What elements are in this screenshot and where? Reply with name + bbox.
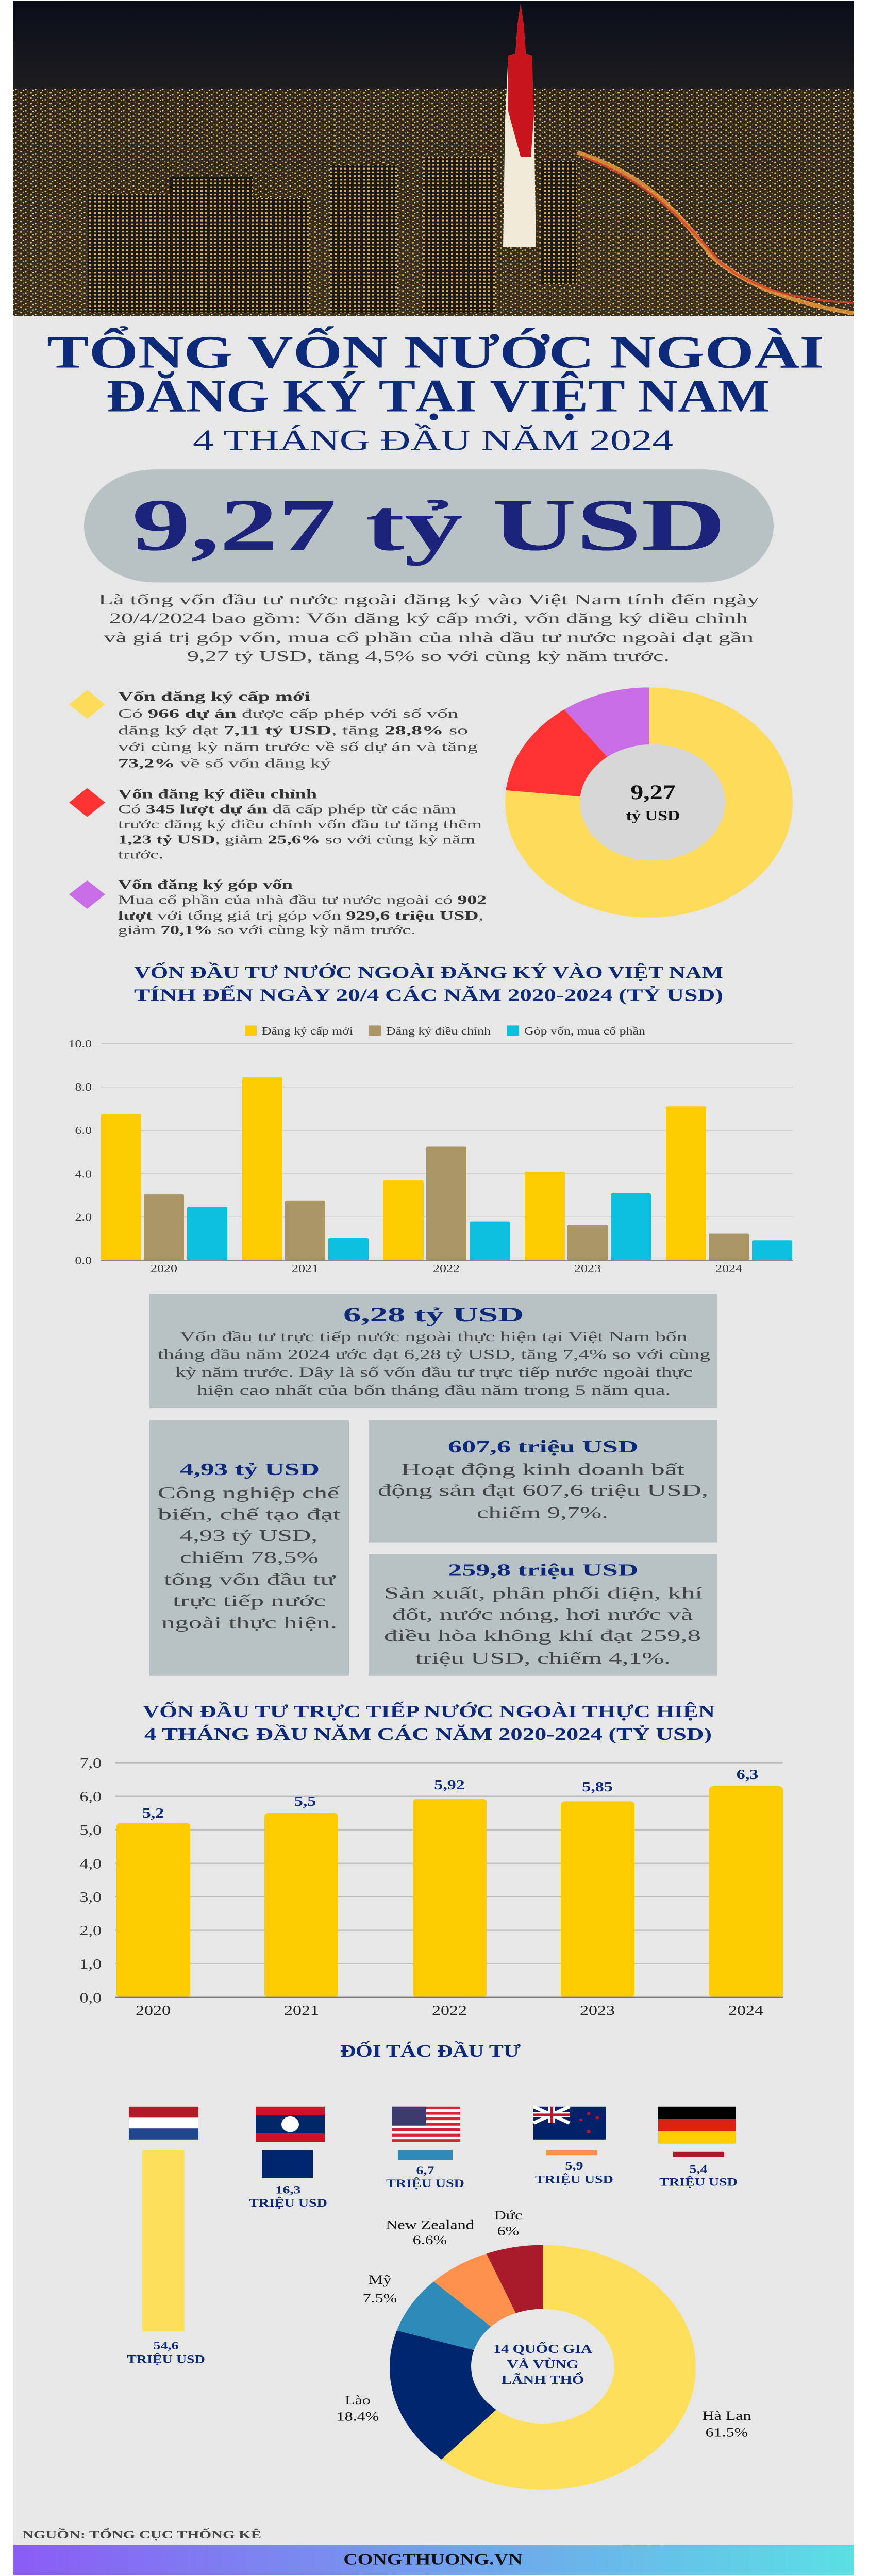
- bar chart: implemented FDI 2020-2024: 5,85: [582, 1779, 613, 1794]
- footer bar: [13, 2545, 854, 2575]
- callout: 6,28 tỷ USD implemented: Vốn đầu tư trực tiếp nước ngoài thực hiện tại Việt Nam bốn: [180, 1329, 687, 1344]
- partner: Germany: [658, 2107, 738, 2189]
- legend: Góp vốn, mua cổ phần: [524, 1025, 645, 1037]
- callout: manufacturing 4,93 tỷ USD: 4,93 tỷ USD: [180, 1460, 320, 1479]
- item: new registration: đăng ký đạt 7,11 tỷ USD , tăng 28,8% so: [118, 723, 468, 737]
- bar chart: implemented FDI 2020-2024: [80, 1755, 783, 2018]
- partner: New Zealand: TRIỆU USD: [535, 2173, 613, 2186]
- hero photo: city at night: [13, 1, 854, 316]
- donut chart: partner shares: 14 QUỐC GIA: [493, 2342, 592, 2356]
- legend: Đăng ký điều chỉnh: [386, 1025, 491, 1037]
- icon: landmark tower: [503, 4, 536, 247]
- bar chart: registered FDI 2020-2024: 8.0: [75, 1081, 92, 1093]
- item: adjusted registration: Có 345 lượt dự án đã cấp phép từ các năm: [118, 802, 456, 816]
- partner: Laos: TRIỆU USD: [249, 2197, 327, 2210]
- bar chart: implemented FDI 2020-2024: 2024: [728, 2003, 763, 2018]
- callout: real estate 607,6 triệu USD: chiếm 9,7%.: [477, 1503, 608, 1521]
- bar chart: implemented FDI 2020-2024: 5,2: [142, 1805, 164, 1821]
- callout: energy 259,8 triệu USD: [369, 1554, 717, 1676]
- heading: investment partners: ĐỐI TÁC ĐẦU TƯ: [340, 2041, 521, 2061]
- callout: energy 259,8 triệu USD: Sản xuất, phân phối điện, khí: [384, 1584, 703, 1602]
- callout: manufacturing 4,93 tỷ USD: ngoài thực hiện.: [161, 1614, 337, 1632]
- intro paragraph: [98, 591, 759, 664]
- bar chart: implemented FDI 2020-2024: 1,0: [80, 1956, 102, 1972]
- donut chart: partner shares: Mỹ: [369, 2273, 392, 2287]
- bar chart: implemented FDI 2020-2024: 7,0: [80, 1755, 102, 1771]
- donut chart: partner shares: LÃNH THỔ: [502, 2372, 584, 2387]
- bar chart: implemented FDI 2020-2024: 6,0: [80, 1789, 102, 1804]
- heading: registered FDI chart: VỐN ĐẦU TƯ NƯỚC NGOÀI ĐĂNG KÝ VÀO VIỆT NAM: [134, 962, 723, 982]
- bar chart: registered FDI 2020-2024: [69, 1038, 793, 1275]
- bar chart: implemented FDI 2020-2024: 2,0: [80, 1923, 102, 1938]
- callout: 6,28 tỷ USD implemented: tháng đầu năm 2024 ước đạt 6,28 tỷ USD, tăng 7,4% so với cùng: [158, 1347, 710, 1362]
- intro paragraph: và giá trị góp vốn, mua cổ phần của nhà đầu tư nước ngoài đạt gần: [104, 630, 754, 646]
- panel: capital components: [69, 689, 487, 937]
- bar chart: registered FDI 2020-2024: 2021: [292, 1263, 319, 1275]
- callout: real estate 607,6 triệu USD: [369, 1420, 717, 1543]
- icon: flag Netherlands: [129, 2107, 198, 2140]
- item: adjusted registration: [118, 787, 482, 861]
- bar chart: registered FDI 2020-2024: 4.0: [75, 1168, 92, 1180]
- footer bar: CONGTHUONG.VN: [343, 2551, 523, 2568]
- source note: NGUỒN: TỔNG CỤC THỐNG KÊ: [22, 2528, 261, 2541]
- item: adjusted registration: 1,23 tỷ USD , giảm 25,6% so với cùng kỳ năm: [118, 833, 475, 846]
- partner: USA: TRIỆU USD: [386, 2177, 464, 2190]
- item: new registration: Có 966 dự án được cấp phép với số vốn: [118, 707, 459, 720]
- bar chart: registered FDI 2020-2024: 0.0: [75, 1255, 92, 1267]
- bar chart: registered FDI 2020-2024: 2020: [151, 1263, 177, 1275]
- partner: New Zealand: 5,9: [565, 2160, 583, 2173]
- partner: New Zealand: [533, 2107, 613, 2186]
- partner: Germany: 5,4: [690, 2163, 708, 2176]
- heading: implemented FDI chart: VỐN ĐẦU TƯ TRỰC TIẾP NƯỚC NGOÀI THỰC HIỆN: [143, 1701, 715, 1721]
- item: new registration: 73,2% về số vốn đăng ký: [118, 756, 331, 770]
- item: capital contribution: giảm 70,1% so với cùng kỳ năm trước.: [118, 923, 415, 937]
- callout: real estate 607,6 triệu USD: Hoạt động kinh doanh bất: [401, 1460, 684, 1478]
- bar chart: registered FDI 2020-2024: 2024: [715, 1263, 742, 1275]
- donut chart: partner shares: Đức: [494, 2208, 522, 2223]
- bar chart: implemented FDI 2020-2024: 5,0: [80, 1822, 102, 1838]
- callout: real estate 607,6 triệu USD: 607,6 triệu USD: [448, 1437, 638, 1456]
- callout: 6,28 tỷ USD implemented: [149, 1294, 717, 1408]
- callout: manufacturing 4,93 tỷ USD: chiếm 78,5%: [180, 1548, 319, 1567]
- title: [47, 326, 824, 421]
- item: capital contribution: Vốn đăng ký góp vốn: [118, 877, 293, 892]
- intro paragraph: 9,27 tỷ USD, tăng 4,5% so với cùng kỳ năm trước.: [187, 648, 670, 664]
- item: new registration: [118, 689, 478, 770]
- bar chart: implemented FDI 2020-2024: 5,92: [434, 1777, 465, 1792]
- callout: 6,28 tỷ USD implemented: hiện cao nhất của bốn tháng đầu năm trong 5 năm qua.: [197, 1383, 671, 1398]
- heading: registered FDI chart: TÍNH ĐẾN NGÀY 20/4 CÁC NĂM 2020-2024 (TỶ USD): [134, 985, 723, 1005]
- title: TỔNG VỐN NƯỚC NGOÀI: [47, 326, 824, 378]
- callout: energy 259,8 triệu USD: triệu USD, chiếm 4,1%.: [415, 1649, 671, 1667]
- bar chart: implemented FDI 2020-2024: 2023: [580, 2003, 615, 2018]
- partner: Netherlands: [127, 2107, 205, 2366]
- bar chart: registered FDI 2020-2024: 2022: [433, 1263, 460, 1275]
- donut chart: partner shares: 7.5%: [363, 2291, 397, 2306]
- donut chart: partner shares: New Zealand: [386, 2217, 474, 2232]
- bar chart: registered FDI 2020-2024: 2.0: [75, 1212, 92, 1224]
- subtitle: 4 THÁNG ĐẦU NĂM 2024: [193, 423, 673, 457]
- donut chart: partner shares: 61.5%: [706, 2426, 748, 2440]
- callout: manufacturing 4,93 tỷ USD: [149, 1420, 349, 1676]
- partner: Laos: [249, 2107, 327, 2210]
- bar chart: implemented FDI 2020-2024: 4,0: [80, 1856, 102, 1872]
- headline pill: total: 9,27 tỷ USD: [132, 484, 726, 566]
- donut chart: partner shares: 6.6%: [413, 2233, 447, 2247]
- callout: manufacturing 4,93 tỷ USD: biến, chế tạo đạt: [158, 1505, 341, 1523]
- heading: registered FDI chart: [134, 962, 723, 1005]
- item: adjusted registration: trước.: [118, 848, 163, 861]
- partner: Netherlands: TRIỆU USD: [127, 2353, 205, 2366]
- callout: 6,28 tỷ USD implemented: kỳ năm trước. Đây là số vốn đầu tư trực tiếp nước ngoài thực: [175, 1365, 693, 1380]
- callout: energy 259,8 triệu USD: đốt, nước nóng, hơi nước và: [392, 1605, 693, 1623]
- bar chart: implemented FDI 2020-2024: 2020: [136, 2003, 171, 2018]
- intro paragraph: Là tổng vốn đầu tư nước ngoài đăng ký vào Việt Nam tính đến ngày: [98, 591, 759, 607]
- partner: Netherlands: 54,6: [154, 2340, 178, 2352]
- legend: [245, 1025, 645, 1037]
- partner: USA: 6,7: [416, 2164, 434, 2177]
- donut chart: partner shares: Hà Lan: [702, 2409, 751, 2423]
- donut chart: partner shares: [337, 2208, 751, 2490]
- bar chart: implemented FDI 2020-2024: 3,0: [80, 1889, 102, 1905]
- partner: USA: [386, 2107, 464, 2190]
- headline pill: total: [84, 469, 774, 582]
- callout: manufacturing 4,93 tỷ USD: trực tiếp nước: [173, 1591, 326, 1610]
- icon: yellow diamond: [69, 690, 105, 719]
- bar chart: implemented FDI 2020-2024: 6,3: [737, 1767, 758, 1782]
- donut chart: partner shares: VÀ VÙNG: [507, 2358, 578, 2371]
- callout: manufacturing 4,93 tỷ USD: Công nghiệp chế: [158, 1484, 340, 1502]
- item: adjusted registration: Vốn đăng ký điều chỉnh: [118, 787, 317, 802]
- bar chart: registered FDI 2020-2024: 2023: [574, 1263, 601, 1275]
- legend: Đăng ký cấp mới: [262, 1025, 353, 1037]
- donut chart: 9,27 tỷ USD breakdown: tỷ USD: [626, 808, 680, 823]
- item: new registration: Vốn đăng ký cấp mới: [118, 689, 310, 704]
- donut chart: 9,27 tỷ USD breakdown: 9,27: [630, 781, 676, 804]
- donut chart: partner shares: Lào: [345, 2393, 371, 2408]
- bar chart: implemented FDI 2020-2024: 2021: [284, 2003, 319, 2018]
- callout: manufacturing 4,93 tỷ USD: tổng vốn đầu tư: [164, 1570, 336, 1588]
- icon: red diamond: [69, 788, 105, 817]
- item: capital contribution: Mua cổ phần của nhà đầu tư nước ngoài có 902: [118, 893, 487, 907]
- callout: 6,28 tỷ USD implemented: 6,28 tỷ USD: [343, 1303, 524, 1326]
- partner: Germany: TRIỆU USD: [659, 2176, 738, 2189]
- item: capital contribution: [118, 877, 487, 937]
- icon: purple diamond: [69, 880, 105, 909]
- bar chart: implemented FDI 2020-2024: 2022: [432, 2003, 467, 2018]
- donut chart: 9,27 tỷ USD breakdown: [505, 687, 793, 918]
- partner: Laos: 16,3: [276, 2183, 300, 2196]
- callout: energy 259,8 triệu USD: 259,8 triệu USD: [448, 1561, 638, 1580]
- item: capital contribution: lượt với tổng giá trị góp vốn 929,6 triệu USD ,: [118, 909, 483, 922]
- title: ĐĂNG KÝ TẠI VIỆT NAM: [106, 370, 770, 421]
- callout: manufacturing 4,93 tỷ USD: 4,93 tỷ USD,: [180, 1527, 317, 1545]
- donut chart: partner shares: 18.4%: [337, 2409, 379, 2424]
- item: new registration: với cùng kỳ năm trước về số dự án và tăng: [118, 740, 478, 754]
- bar chart: implemented FDI 2020-2024: 5,5: [294, 1793, 316, 1809]
- callout: energy 259,8 triệu USD: điều hòa không khí đạt 259,8: [384, 1626, 701, 1645]
- intro paragraph: 20/4/2024 bao gồm: Vốn đăng ký cấp mới, vốn đăng ký điều chỉnh: [109, 611, 748, 626]
- bar chart: registered FDI 2020-2024: 6.0: [75, 1125, 92, 1137]
- bar chart: implemented FDI 2020-2024: 0,0: [80, 1990, 102, 2006]
- heading: implemented FDI chart: [143, 1701, 715, 1744]
- icon: flag USA: [392, 2107, 460, 2142]
- heading: implemented FDI chart: 4 THÁNG ĐẦU NĂM CÁC NĂM 2020-2024 (TỶ USD): [144, 1724, 712, 1744]
- icon: flag New Zealand: [533, 2107, 606, 2140]
- icon: flag Laos: [256, 2107, 325, 2142]
- item: adjusted registration: trước đăng ký điều chỉnh vốn đầu tư tăng thêm: [118, 818, 482, 831]
- bar chart: registered FDI 2020-2024: 10.0: [69, 1038, 92, 1050]
- callout: real estate 607,6 triệu USD: động sản đạt 607,6 triệu USD,: [378, 1481, 708, 1499]
- icon: flag Germany: [658, 2107, 736, 2144]
- donut chart: partner shares: 6%: [497, 2224, 519, 2239]
